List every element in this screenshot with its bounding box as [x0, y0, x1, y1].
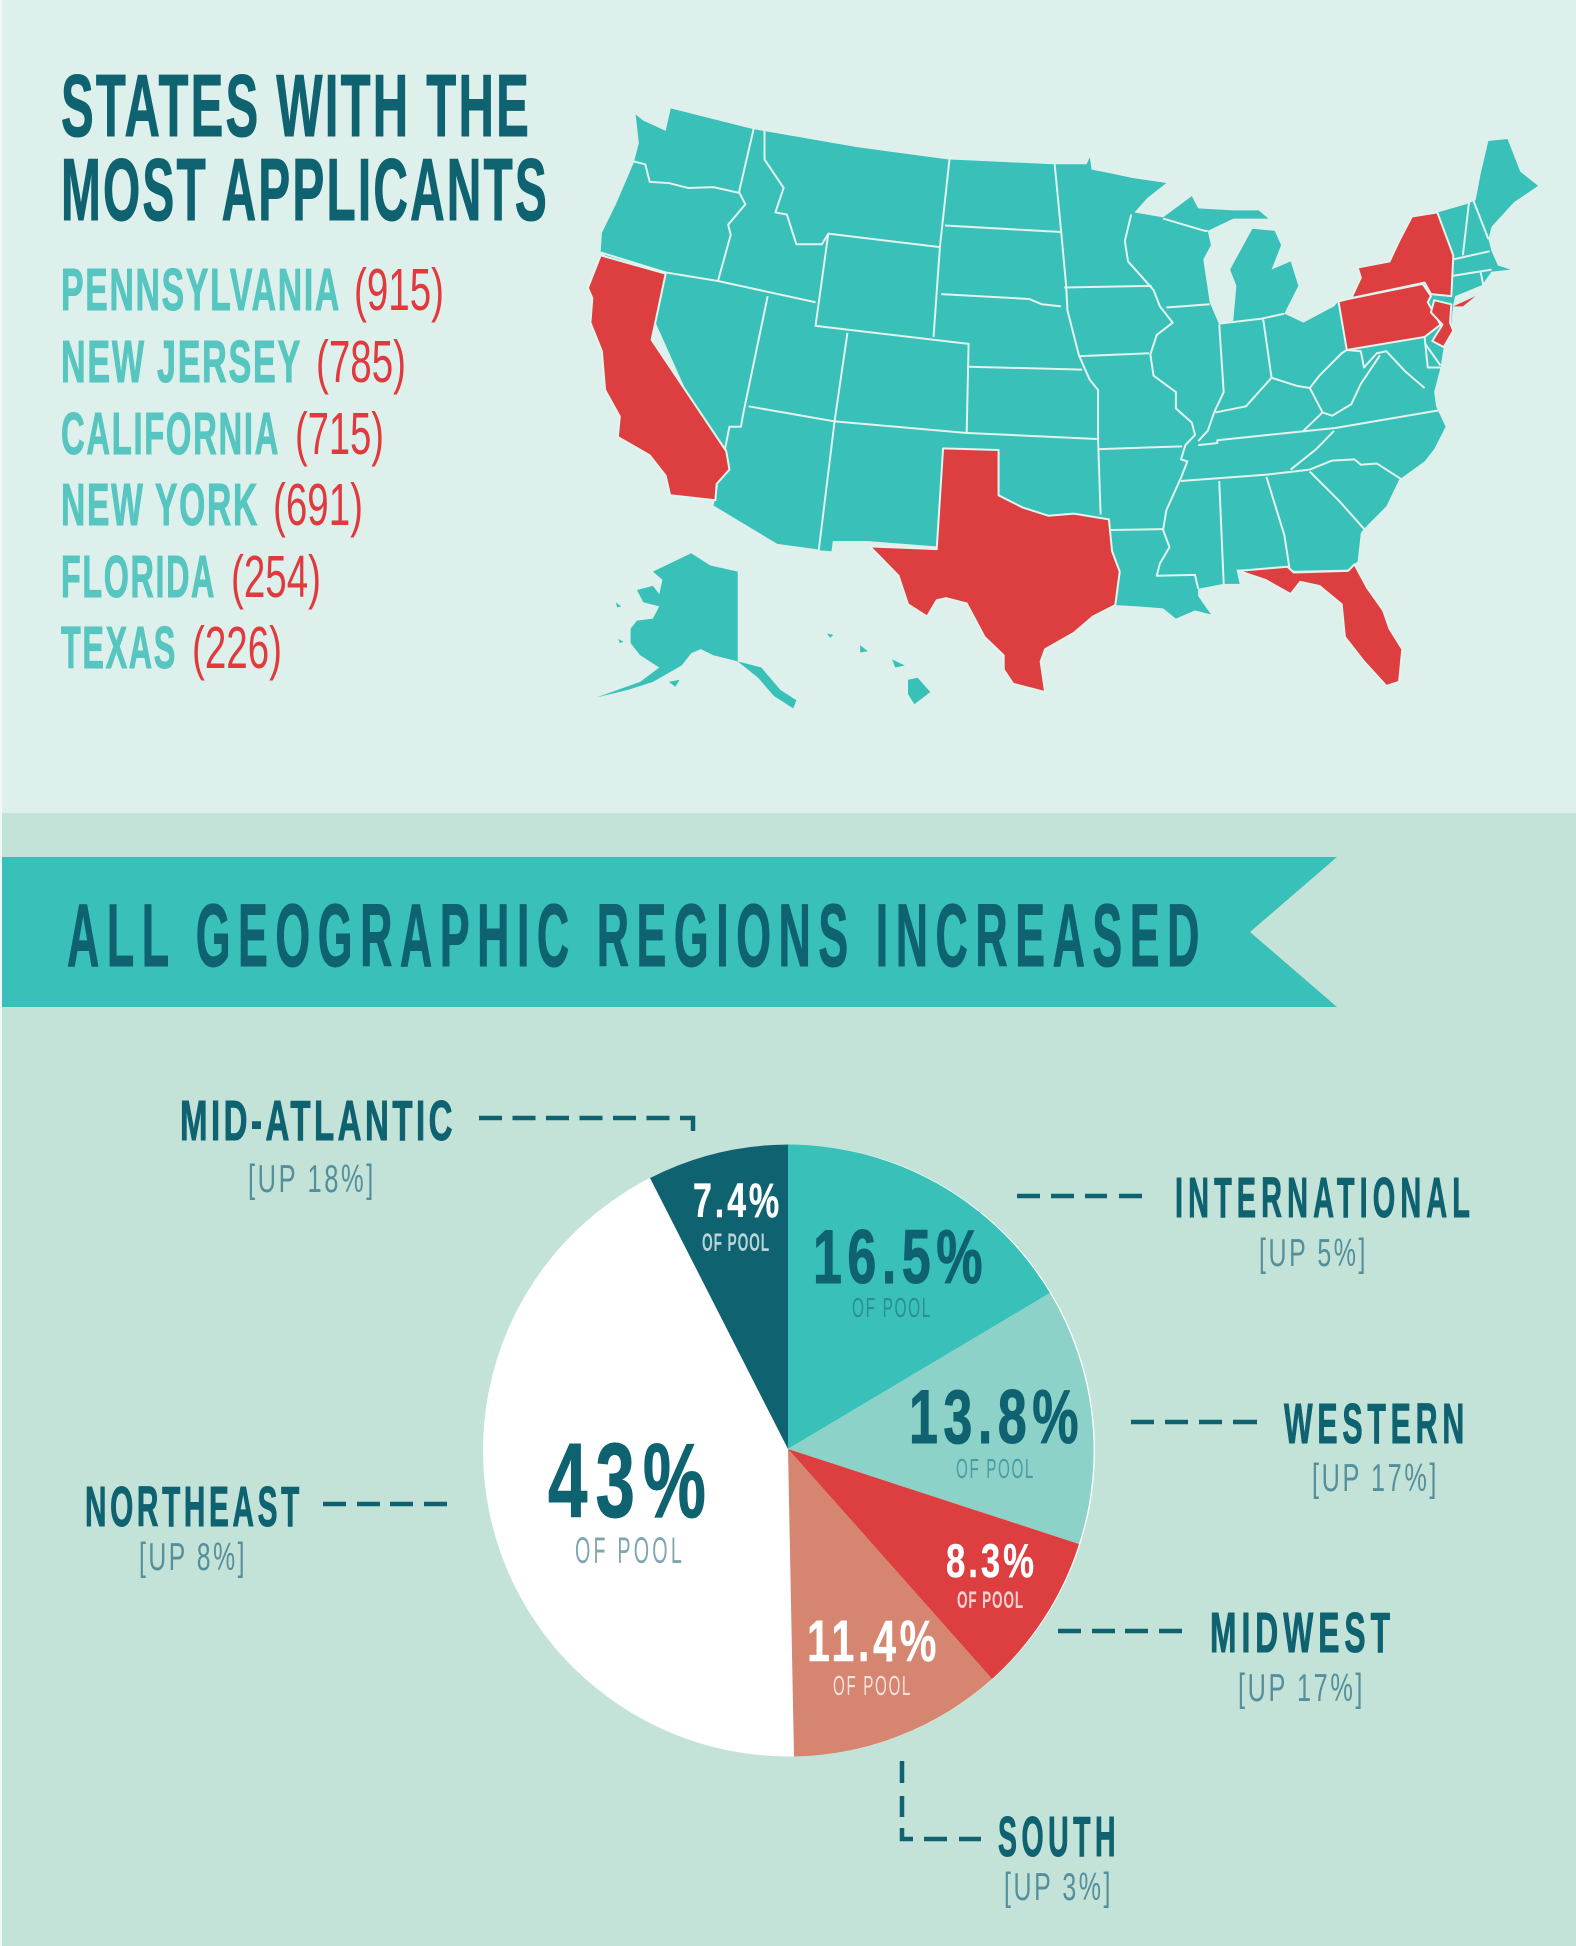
pie label: 16.5%: 16.5% — [813, 1215, 988, 1300]
heading: states with the most applicants: STATES WITH THE — [61, 56, 531, 155]
map: highlighted states — [588, 212, 1476, 692]
pie label: 13.8%: 13.8% — [909, 1375, 1084, 1460]
map: United States — [589, 108, 1538, 708]
pie label: 43%: 43% — [548, 1422, 714, 1540]
label: mid-atlantic: MID-ATLANTIC — [180, 1089, 456, 1153]
heading: states with the most applicants — [61, 56, 549, 239]
leader line: western — [1131, 1420, 1257, 1424]
label: south: [UP 3%] — [1004, 1866, 1113, 1909]
panel: bottom section background — [0, 813, 1576, 1946]
leader line: south — [902, 1761, 981, 1839]
label: northeast: NORTHEAST — [85, 1475, 303, 1539]
label: midwest — [1210, 1601, 1395, 1710]
list: top states with applicant counts: PENNSYLVANIA — [61, 257, 341, 323]
label: western — [1284, 1392, 1469, 1500]
label: western: [UP 17%] — [1312, 1457, 1439, 1500]
pie label: 11.4% — [807, 1609, 940, 1701]
pie label: 16.5% — [813, 1215, 988, 1323]
leader line: mid-atlantic — [479, 1118, 693, 1131]
pie label: 43% — [548, 1422, 714, 1571]
map: Alaska — [597, 553, 796, 708]
leader line: midwest — [1058, 1629, 1182, 1633]
banner: all geographic regions increased — [2, 857, 1337, 1007]
pie label: 8.3%: 8.3% — [946, 1534, 1037, 1587]
label: midwest: MIDWEST — [1210, 1601, 1395, 1665]
left edge strip — [0, 0, 2, 1946]
map: Hawaii — [827, 634, 930, 704]
list: top states with applicant counts: (715) — [295, 401, 384, 467]
map: state borders — [601, 129, 1492, 589]
list: top states with applicant counts — [61, 257, 444, 681]
text: SOUTH — [998, 1805, 1120, 1869]
pie label: 7.4% — [693, 1175, 782, 1257]
list: top states with applicant counts: (226) — [192, 615, 282, 681]
pie chart: share of pool by region — [483, 1144, 1095, 1756]
list: top states with applicant counts: NEW JERSEY — [61, 329, 302, 395]
pie label: 8.3%: OF POOL — [957, 1587, 1024, 1614]
pie label: 7.4%: OF POOL — [702, 1229, 770, 1257]
map: lower 48 silhouette — [601, 108, 1538, 619]
label: south — [998, 1805, 1120, 1909]
heading: states with the most applicants: MOST APPLICANTS — [61, 140, 549, 239]
pie label: 7.4%: 7.4% — [693, 1175, 782, 1228]
label: international: [UP 5%] — [1259, 1232, 1368, 1275]
leader line: international — [1017, 1194, 1142, 1198]
label: mid-atlantic: [UP 18%] — [248, 1158, 376, 1201]
pie label: 11.4%: OF POOL — [833, 1670, 912, 1701]
label: midwest: [UP 17%] — [1238, 1667, 1365, 1710]
list: top states with applicant counts: FLORIDA — [61, 544, 216, 610]
pie label: 8.3% — [946, 1534, 1037, 1614]
label: northeast: [UP 8%] — [139, 1536, 247, 1579]
pie label: 43%: OF POOL — [575, 1530, 685, 1571]
list: top states with applicant counts: CALIFORNIA — [61, 401, 280, 467]
label: international — [1175, 1166, 1475, 1275]
label: mid-atlantic — [180, 1089, 456, 1201]
list: top states with applicant counts: (691) — [273, 472, 363, 538]
list: top states with applicant counts: TEXAS — [61, 615, 177, 681]
list: top states with applicant counts: (785) — [316, 329, 406, 395]
pie label: 13.8% — [909, 1375, 1084, 1484]
pie label: 11.4%: 11.4% — [807, 1609, 940, 1674]
list: top states with applicant counts: NEW YORK — [61, 472, 259, 538]
leader line: northeast — [323, 1502, 447, 1506]
pie label: 13.8%: OF POOL — [956, 1453, 1035, 1484]
pie label: 16.5%: OF POOL — [852, 1292, 932, 1323]
list: top states with applicant counts: (254) — [231, 544, 321, 610]
list: top states with applicant counts: (915) — [354, 257, 444, 323]
label: northeast — [85, 1475, 303, 1579]
panel: top section background — [0, 0, 1576, 813]
